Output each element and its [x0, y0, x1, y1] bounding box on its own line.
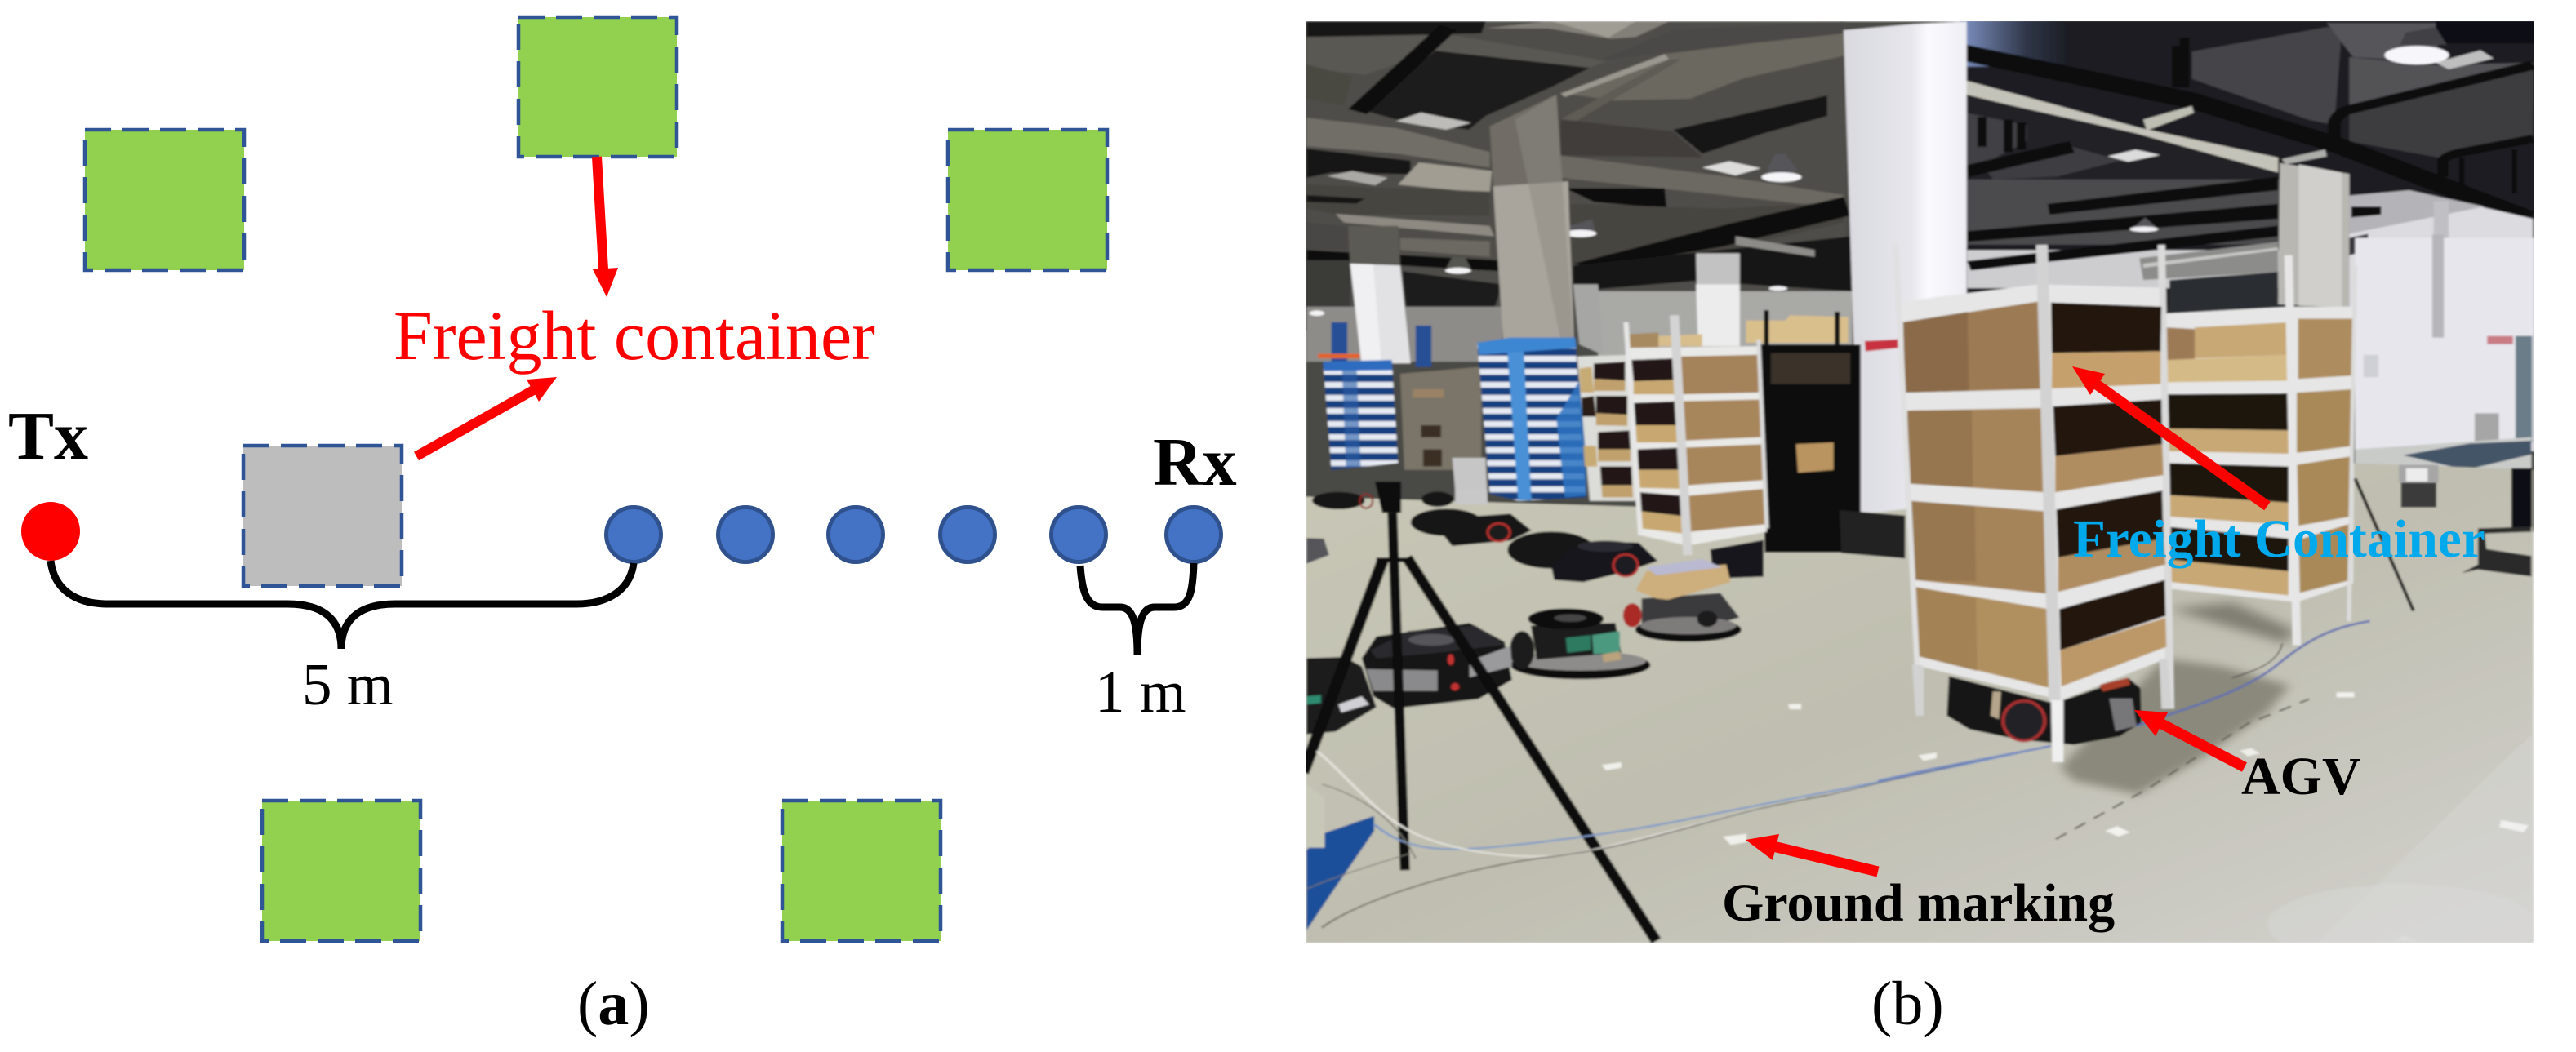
arrow: AGV callout	[2134, 710, 2245, 767]
receiver positions: blue dots	[606, 508, 1221, 562]
lamp	[1446, 257, 1471, 269]
beams right of left pillar	[1564, 32, 1844, 100]
black shelf	[1746, 315, 1848, 343]
front freight shelf and carried AGV	[1896, 245, 2172, 762]
rear freight shelf	[2164, 255, 2532, 646]
caption (b): (b)	[1871, 970, 1944, 1038]
label: Tx: Tx	[8, 398, 88, 474]
cables and pallet	[1306, 746, 2051, 930]
freight container: bottom right	[782, 801, 941, 941]
arrow: top container to label	[593, 157, 618, 297]
label: Ground marking: Ground marking	[1722, 873, 2115, 933]
central concrete pillar	[1844, 21, 1967, 530]
tripod	[1303, 482, 1657, 941]
label: Rx: Rx	[1153, 424, 1237, 500]
freight container: top left	[85, 130, 244, 270]
arrow: ground marking callout	[1746, 834, 1878, 872]
ceiling and back wall, left half	[1305, 21, 1853, 366]
floor	[1306, 463, 2534, 943]
brace: 5 m span	[51, 561, 634, 649]
arrow: grey container to label	[416, 377, 557, 456]
arrow: freight container callout	[2072, 366, 2267, 506]
label: 5 m: 5 m	[302, 651, 394, 717]
freight container: bottom left	[262, 801, 420, 941]
background racks and shelves	[1318, 310, 1898, 555]
white shelf	[1630, 332, 1658, 348]
panel: warehouse photo (b)	[1303, 20, 2538, 965]
left pillar	[1489, 95, 1563, 267]
label: Freight Container (blue): Freight Container	[2073, 510, 2485, 569]
label: AGV: AGV	[2241, 747, 2361, 806]
floor markers, left	[1602, 704, 1937, 845]
stack behind shelf	[1577, 355, 1635, 501]
label: Freight container: Freight container	[394, 296, 875, 375]
caption (a): (a)	[577, 970, 650, 1038]
far-left pillar	[1348, 226, 1400, 265]
black box beside pillar	[1840, 510, 1905, 558]
panel: floor plan diagram (a)	[8, 17, 1237, 1038]
obstructing container: grey	[243, 446, 402, 586]
transmitter: red dot	[21, 502, 80, 561]
freight container: top right	[948, 130, 1107, 270]
floor wear, shadow and stains	[2056, 659, 2538, 965]
AGV robots on the floor	[1306, 490, 1764, 735]
ceiling, right half	[1959, 21, 2534, 313]
freight container: top centre	[518, 17, 677, 157]
blue cable, rear	[1878, 621, 2369, 781]
label: 1 m: 1 m	[1095, 659, 1186, 725]
brace: 1 m span	[1080, 563, 1194, 655]
right wall and glossy floor	[2356, 234, 2534, 486]
